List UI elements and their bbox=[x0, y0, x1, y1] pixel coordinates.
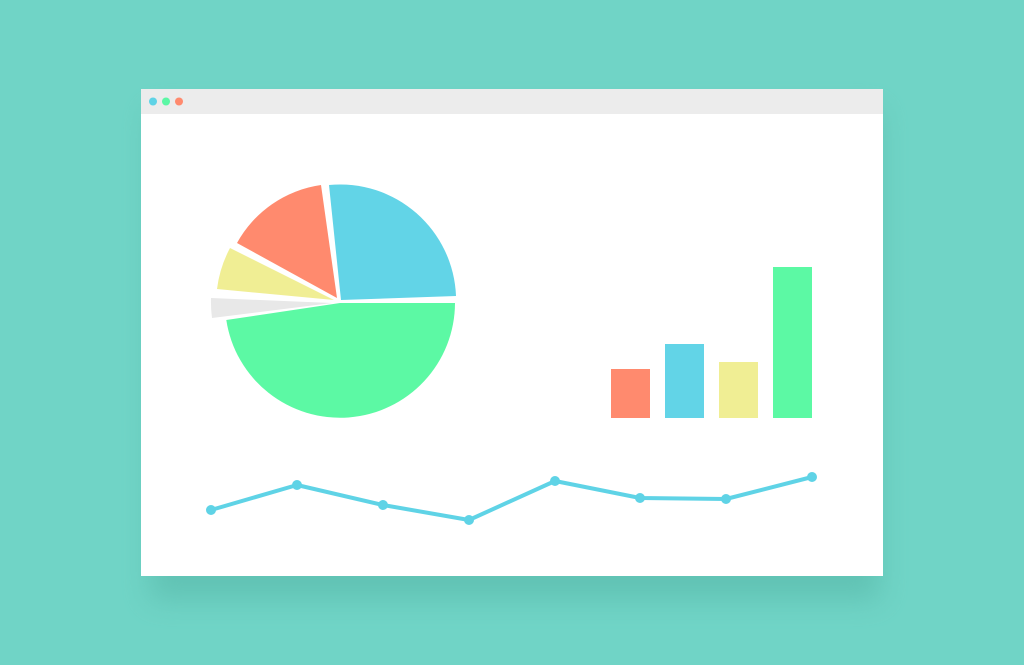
line chart bbox=[206, 472, 817, 525]
pie chart bbox=[211, 184, 456, 418]
bar chart bbox=[611, 267, 812, 418]
browser window bbox=[141, 89, 883, 576]
window header bar bbox=[141, 89, 883, 114]
